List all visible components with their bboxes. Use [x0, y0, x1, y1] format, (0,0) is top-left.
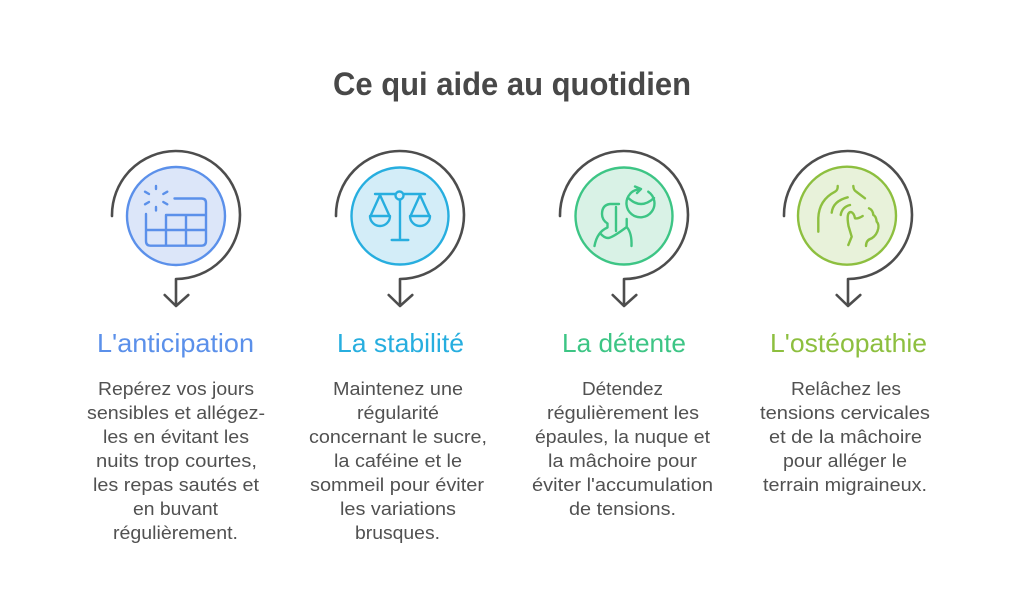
- body text: Maintenez une: [333, 378, 463, 399]
- circular arrow: [784, 151, 912, 306]
- body text: pour alléger le: [783, 450, 907, 471]
- body text: régulièrement les: [547, 402, 699, 423]
- body text: terrain migraineux.: [763, 474, 927, 495]
- body text: la mâchoire pour: [548, 450, 697, 471]
- body text: tensions cervicales: [760, 402, 930, 423]
- body text: [532, 378, 713, 519]
- body text: de tensions.: [569, 498, 676, 519]
- body text: éviter l'accumulation: [532, 474, 713, 495]
- icon: person and rotating head: [576, 168, 672, 264]
- body text: [760, 378, 930, 495]
- body text: sommeil pour éviter: [310, 474, 484, 495]
- body text: concernant le sucre,: [309, 426, 487, 447]
- body text: la caféine et le: [334, 450, 462, 471]
- heading: L'anticipation: [97, 328, 254, 358]
- heading: La stabilité: [337, 328, 464, 358]
- heading: La détente: [562, 328, 686, 358]
- body text: [309, 378, 487, 543]
- panel: osteopathie: [760, 151, 930, 495]
- body text: régulièrement.: [113, 522, 238, 543]
- body text: Relâchez les: [791, 378, 901, 399]
- title: Ce qui aide au quotidien: [333, 66, 691, 102]
- body text: brusques.: [355, 522, 440, 543]
- panel: anticipation: [87, 151, 265, 543]
- body text: les repas sautés et: [93, 474, 259, 495]
- body text: et de la mâchoire: [769, 426, 922, 447]
- heading: L'ostéopathie: [770, 328, 927, 358]
- body text: nuits trop courtes,: [96, 450, 257, 471]
- panel: detente: [532, 151, 713, 519]
- circular arrow: [112, 151, 240, 306]
- body text: les en évitant les: [103, 426, 249, 447]
- panel: stabilite: [309, 151, 487, 543]
- icon: scales: [352, 168, 448, 264]
- body text: [87, 378, 265, 543]
- body text: régularité: [357, 402, 439, 423]
- body text: Détendez: [582, 378, 663, 399]
- icon: calendar: [127, 167, 225, 265]
- body text: les variations: [340, 498, 456, 519]
- circular arrow: [560, 151, 688, 306]
- body text: en buvant: [133, 498, 218, 519]
- circular arrow: [336, 151, 464, 306]
- body text: épaules, la nuque et: [535, 426, 710, 447]
- icon: neck and hand: [798, 167, 896, 265]
- body text: Repérez vos jours: [98, 378, 254, 399]
- body text: sensibles et allégez-: [87, 402, 265, 423]
